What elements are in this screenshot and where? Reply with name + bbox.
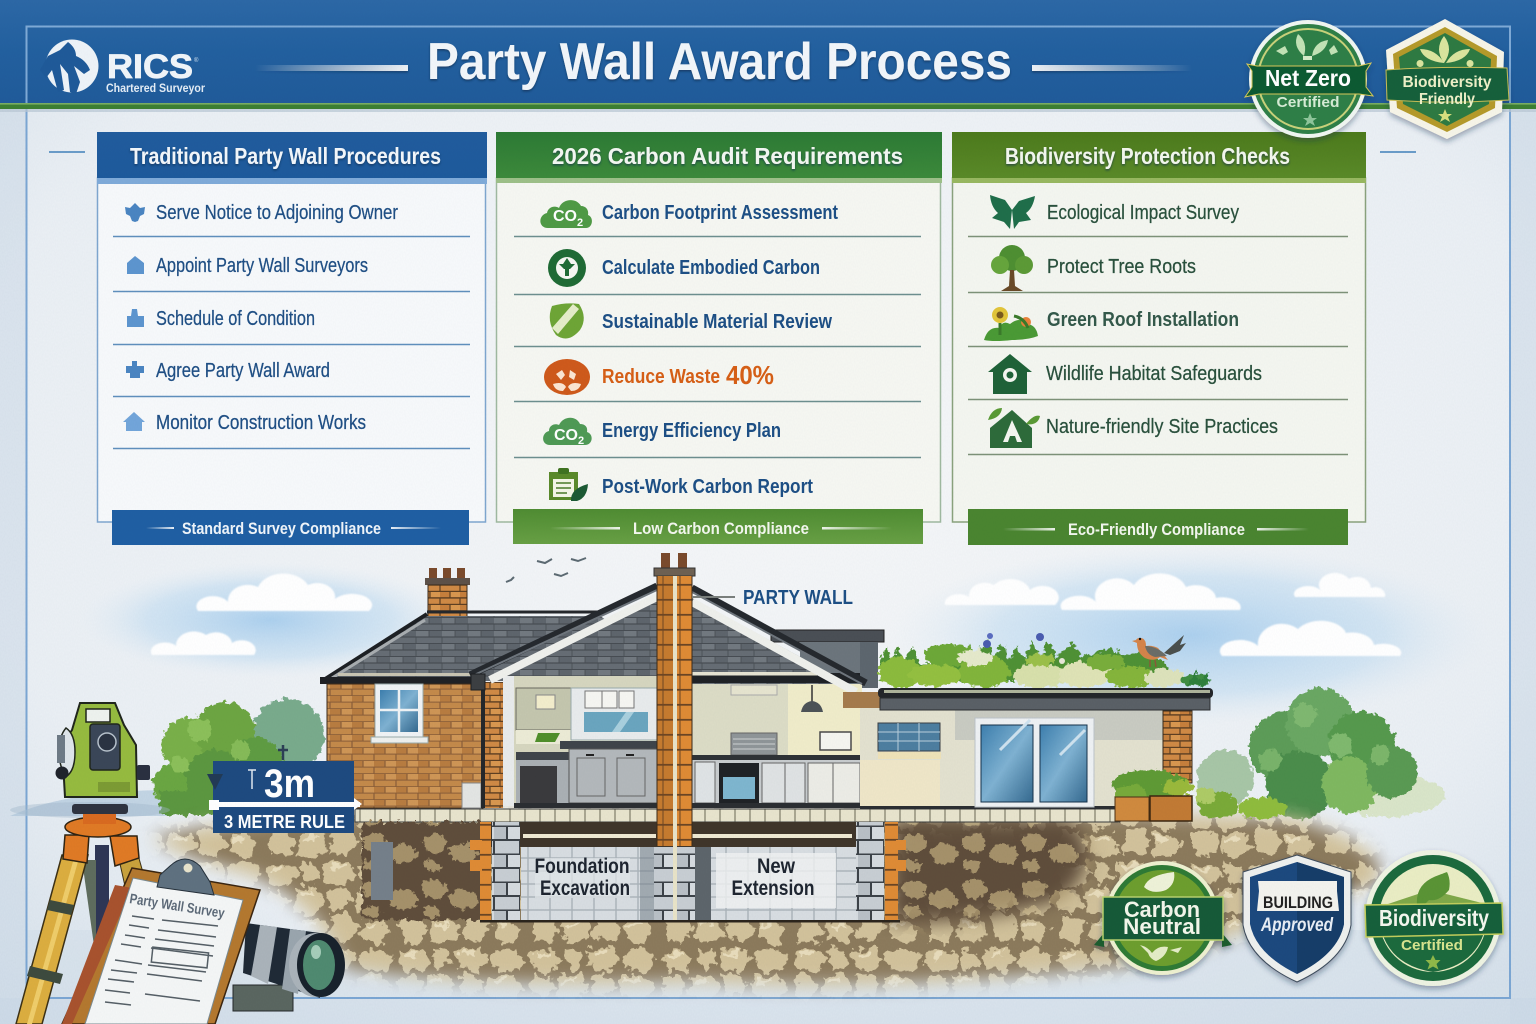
3 metre rule sign: 3m [264, 762, 315, 806]
left roof [320, 612, 700, 684]
footer ribbon: standard survey compliance: Standard Survey Compliance [182, 519, 381, 538]
badge: biodiversity certified: Certified [1401, 937, 1463, 954]
planters and shrubs [1112, 770, 1286, 821]
surveying tripod and total station [10, 703, 170, 1024]
extension wall [843, 692, 1192, 809]
row: serve notice: Serve Notice to Adjoining Owner [156, 202, 398, 224]
total station [56, 703, 150, 797]
footer ribbon: standard survey compliance [112, 510, 469, 545]
distant water and trees: left [10, 699, 346, 816]
back roof [771, 630, 884, 688]
row: embodied carbon: Calculate Embodied Carbon [602, 257, 820, 279]
row: carbon report [549, 468, 813, 501]
darker soil beside the extension [882, 822, 1100, 934]
row: reduce waste: 40% [726, 360, 774, 390]
footer ribbon: eco-friendly compliance: Eco-Friendly Compliance [1068, 520, 1245, 539]
row: nature friendly [988, 408, 1278, 448]
party wall chimney [654, 553, 695, 920]
badge: carbon neutral: Carbon [1124, 897, 1200, 922]
brick wall [327, 684, 483, 808]
badge: building approved: BUILDING [1263, 893, 1333, 912]
row: material review [550, 303, 832, 339]
distant trees: right [1197, 688, 1445, 819]
row: agree award: Agree Party Wall Award [156, 360, 330, 382]
left kitchen [514, 674, 657, 808]
heading [496, 132, 942, 183]
row: energy efficiency: CO [554, 427, 578, 444]
row: energy efficiency: Energy Efficiency Plan [602, 420, 781, 442]
label: new extension [732, 855, 814, 900]
foundation section [362, 822, 906, 922]
label: foundation excavation [534, 855, 630, 900]
birds [506, 558, 586, 582]
badge: biodiversity certified [1365, 850, 1503, 986]
kitchen window [878, 723, 941, 759]
flat roof fascia [878, 688, 1213, 710]
row: reduce waste [544, 359, 774, 395]
sky with clouds [80, 545, 1490, 725]
3 metre rule sign: 3 METRE RULE [224, 812, 345, 832]
heading [97, 132, 487, 184]
badge: carbon neutral: Neutral [1123, 914, 1201, 939]
row: energy efficiency: 2 [578, 435, 584, 447]
pier and service box [462, 675, 515, 808]
badge: building approved [1243, 855, 1351, 982]
row: reduce waste: Reduce Waste [602, 366, 720, 388]
label: party wall: PARTY WALL [743, 587, 853, 609]
badge: biodiversity certified: Biodiversity [1379, 905, 1489, 931]
3 metre rule sign [207, 761, 362, 833]
gable roof [470, 586, 866, 692]
heading: 2026 Carbon Audit Requirements [552, 143, 903, 169]
footer ribbon: eco-friendly compliance [968, 509, 1348, 545]
footer ribbon: low carbon compliance: Low Carbon Compliance [633, 519, 809, 538]
logo: RICS: Chartered Surveyor [106, 81, 205, 95]
badge: net zero certified: Net Zero [1265, 65, 1351, 91]
heading: Biodiversity Protection Checks [1005, 143, 1290, 169]
heading: Traditional Party Wall Procedures [130, 143, 441, 169]
row: appoint surveyors: Appoint Party Wall Surveyors [156, 255, 368, 277]
tripod head [63, 804, 139, 866]
badge: biodiversity friendly: Biodiversity [1402, 74, 1492, 91]
tripod legs [16, 845, 158, 1024]
row: protect roots [991, 245, 1196, 291]
row: carbon footprint: CO [553, 208, 577, 225]
title: Party Wall Award Process [427, 33, 1012, 91]
row: green roof [984, 307, 1239, 341]
right kitchen [692, 684, 862, 808]
row: protect roots: Protect Tree Roots [1047, 256, 1196, 278]
bird [1132, 635, 1186, 667]
excavated rubble ground [130, 800, 1430, 1010]
sliding door [975, 718, 1094, 807]
row: carbon report: Post-Work Carbon Report [602, 476, 813, 498]
row: ecological survey: Ecological Impact Survey [1047, 202, 1239, 224]
row: monitor works: Monitor Construction Works [156, 412, 366, 434]
label: foundation excavation: Foundation [534, 855, 630, 878]
label: new extension: Extension [732, 877, 814, 900]
logo: RICS: ® [194, 57, 199, 64]
footer ribbon: low carbon compliance [513, 509, 923, 544]
title [255, 33, 1192, 91]
row: material review: Sustainable Material Review [602, 311, 832, 333]
row: green roof: Green Roof Installation [1047, 309, 1239, 331]
row: nature friendly: Nature-friendly Site Practices [1046, 416, 1278, 438]
logo: RICS [40, 40, 205, 95]
row: ecological survey [990, 195, 1239, 229]
row: embodied carbon [548, 249, 820, 287]
row: carbon footprint: 2 [577, 217, 583, 229]
house cross-section [320, 553, 1286, 922]
corner ticks [49, 151, 1416, 153]
camera and case [233, 923, 345, 1011]
badge: building approved: Approved [1260, 915, 1333, 936]
logo: RICS: RICS [107, 48, 193, 86]
badge: biodiversity friendly [1386, 19, 1509, 139]
badge: carbon neutral [1094, 861, 1232, 975]
header band [0, 0, 1536, 112]
heading [952, 132, 1366, 183]
badge: net zero certified [1245, 20, 1373, 138]
panel: traditional procedures [97, 132, 487, 545]
panel: carbon audit [496, 132, 942, 544]
row: carbon footprint: Carbon Footprint Assessment [602, 202, 838, 224]
clipboard: party wall survey [62, 859, 260, 1024]
label: new extension: New [757, 855, 796, 878]
row: schedule of condition: Schedule of Condition [156, 308, 315, 330]
badge: biodiversity friendly: Friendly [1419, 91, 1475, 108]
badge: net zero certified: Certified [1276, 94, 1340, 111]
row: carbon footprint [540, 200, 838, 229]
window [371, 684, 428, 743]
panel: biodiversity checks [952, 132, 1366, 545]
clipboard heading: Party Wall Survey [129, 890, 226, 921]
green roof planting [878, 633, 1210, 688]
row: wildlife safeguards: Wildlife Habitat Safeguards [1046, 363, 1262, 385]
row: energy efficiency [543, 418, 781, 447]
label: foundation excavation: Excavation [540, 877, 630, 900]
row: wildlife safeguards [988, 354, 1262, 394]
plinth [355, 809, 1120, 822]
left chimney [425, 568, 470, 630]
